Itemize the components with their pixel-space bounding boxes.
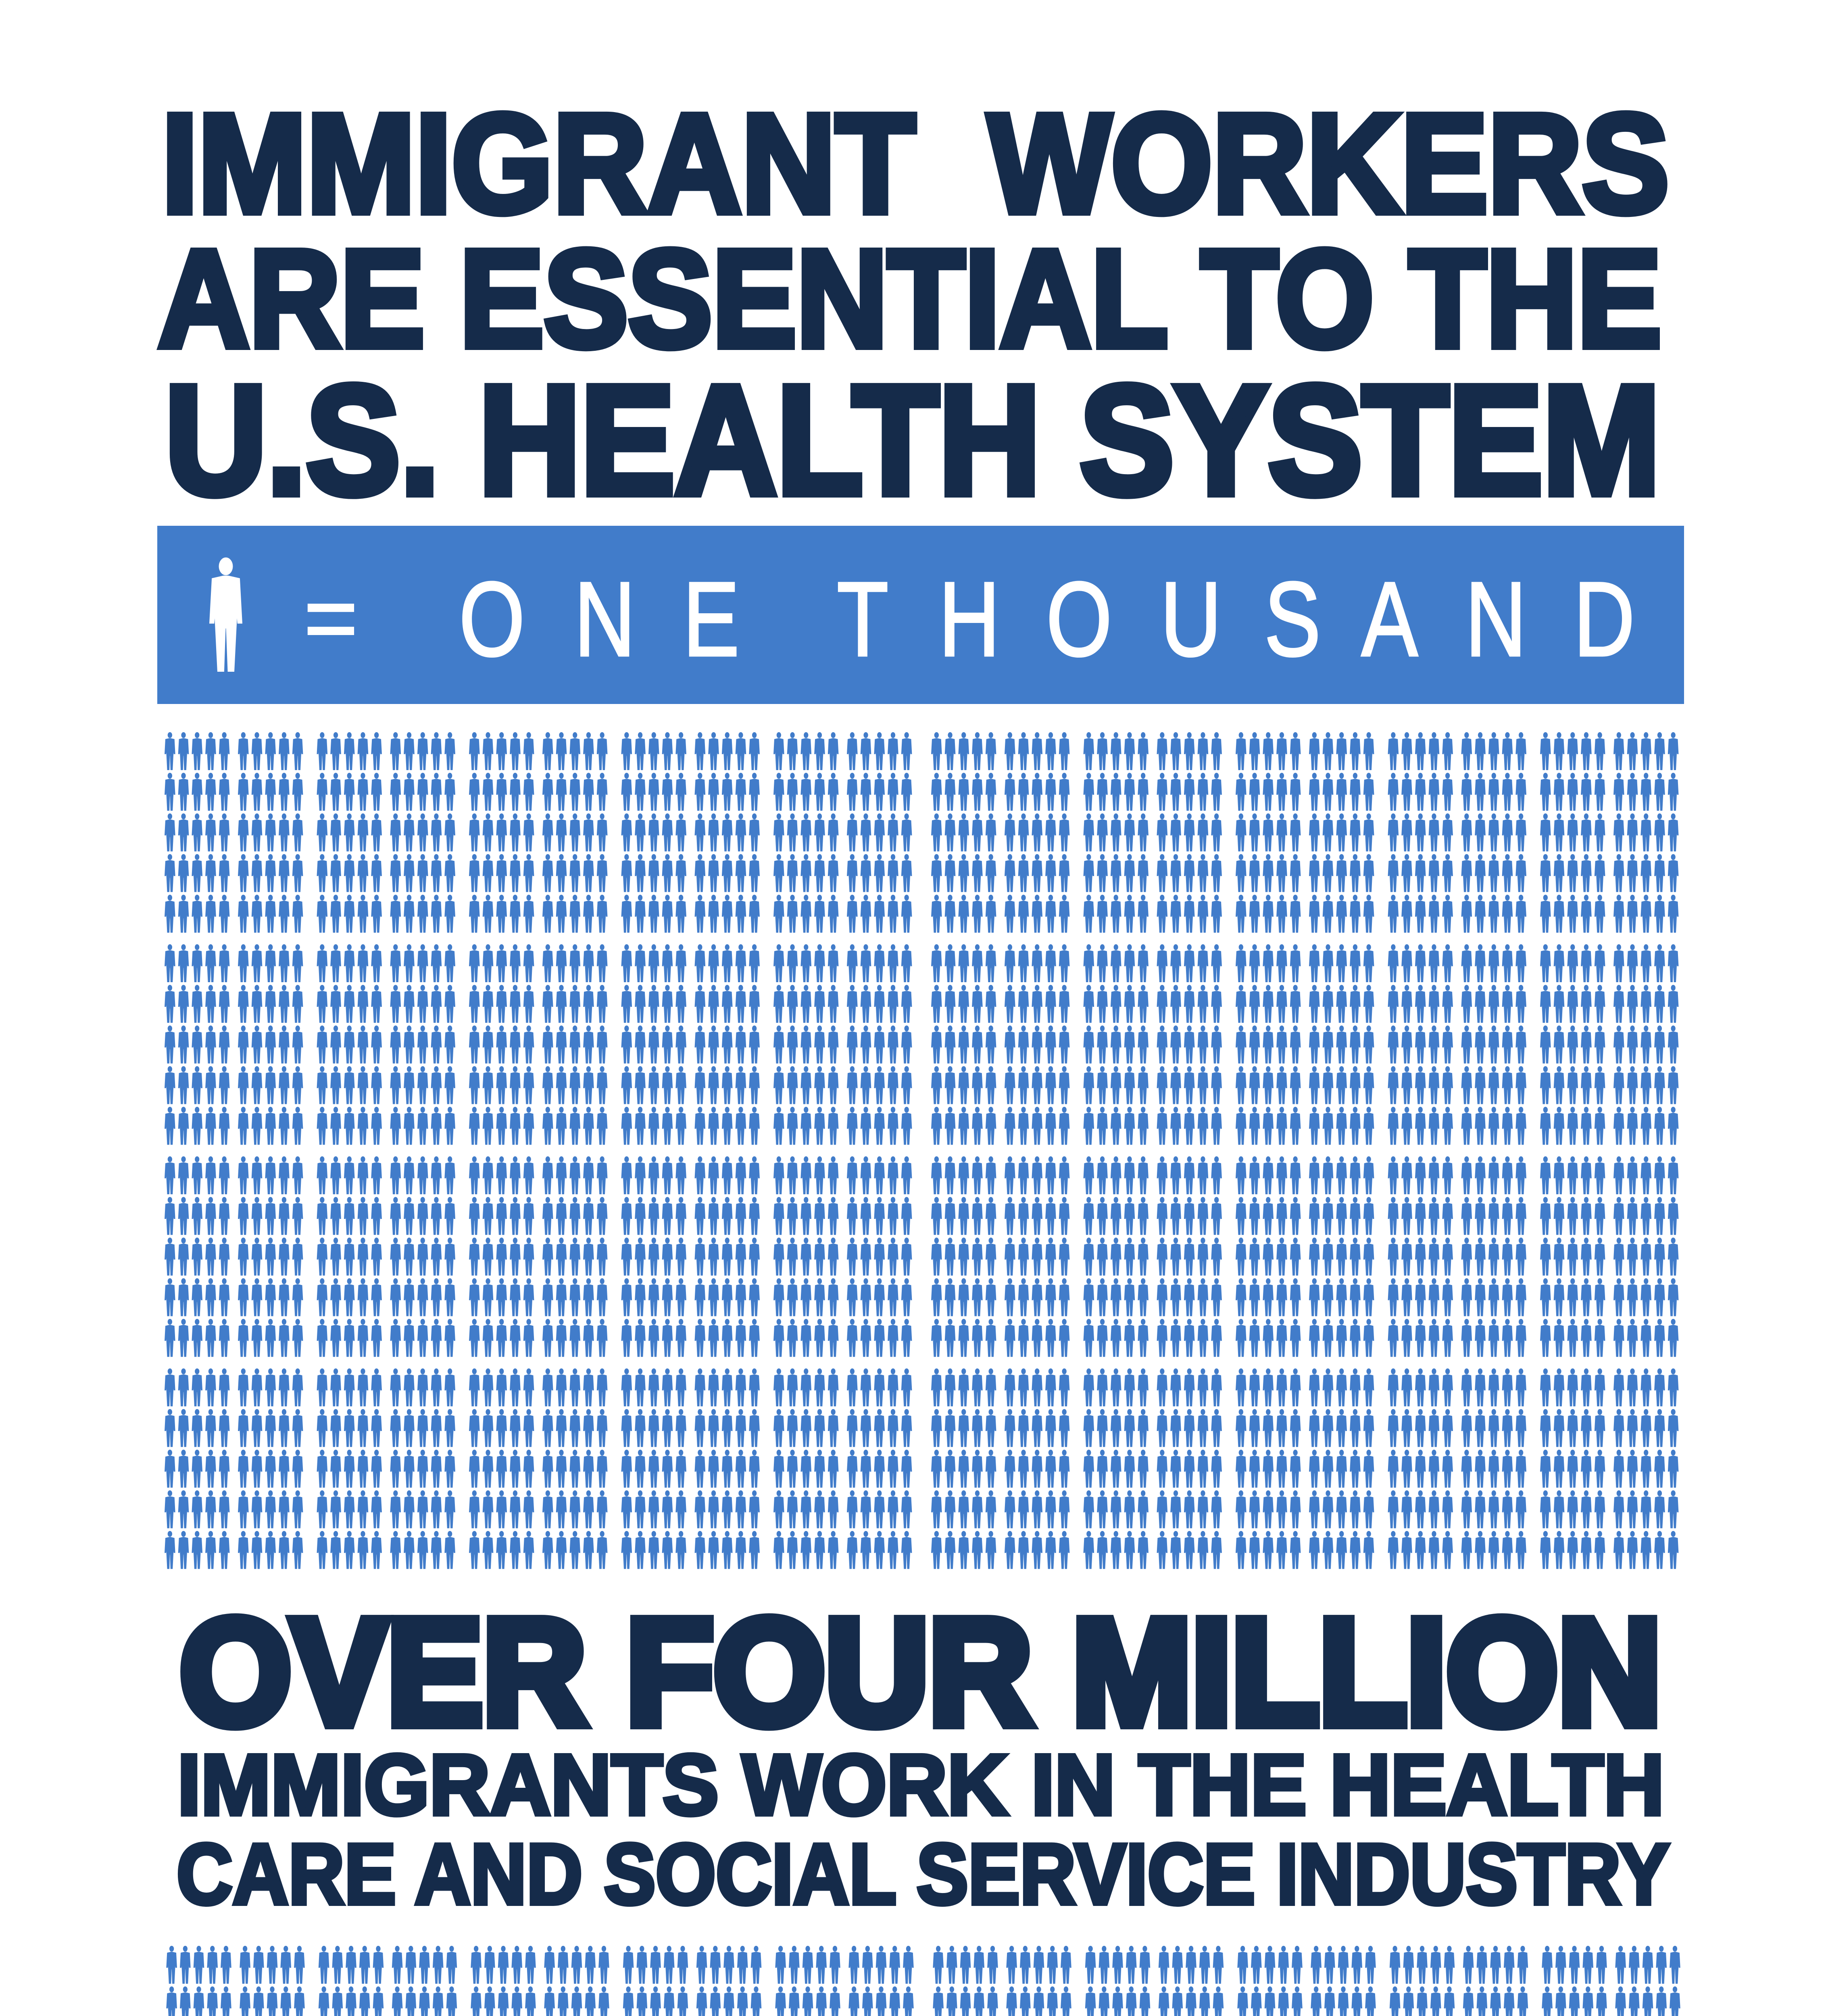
block 2: [165, 944, 1678, 1145]
subheading line 2: CARE AND SOCIAL SERVICE INDUSTRY: [177, 1826, 1670, 1922]
heading: over four million: [177, 1588, 1670, 1922]
block 1: [165, 732, 1678, 933]
legend text: ONE THOUSAND: [459, 560, 1635, 678]
legend bar: one figure equals one thousand: [157, 526, 1684, 704]
equals sign: =: [304, 566, 358, 669]
block 4: [165, 1368, 1678, 1569]
title line 1: IMMIGRANT WORKERS: [162, 85, 1669, 242]
block 1: [166, 1946, 1680, 2016]
subheading line 1: IMMIGRANTS WORK IN THE HEALTH: [177, 1737, 1664, 1833]
big number line: OVER FOUR MILLION: [180, 1588, 1661, 1756]
title: [158, 85, 1669, 527]
title line 3: U.S. HEALTH SYSTEM: [165, 354, 1660, 527]
block 3: [165, 1156, 1678, 1357]
pictogram grid: upper: [165, 732, 1678, 1569]
icon: person: [209, 557, 242, 672]
title line 2: ARE ESSENTIAL TO THE: [158, 221, 1661, 376]
pictogram grid: lower: [166, 1946, 1682, 2016]
